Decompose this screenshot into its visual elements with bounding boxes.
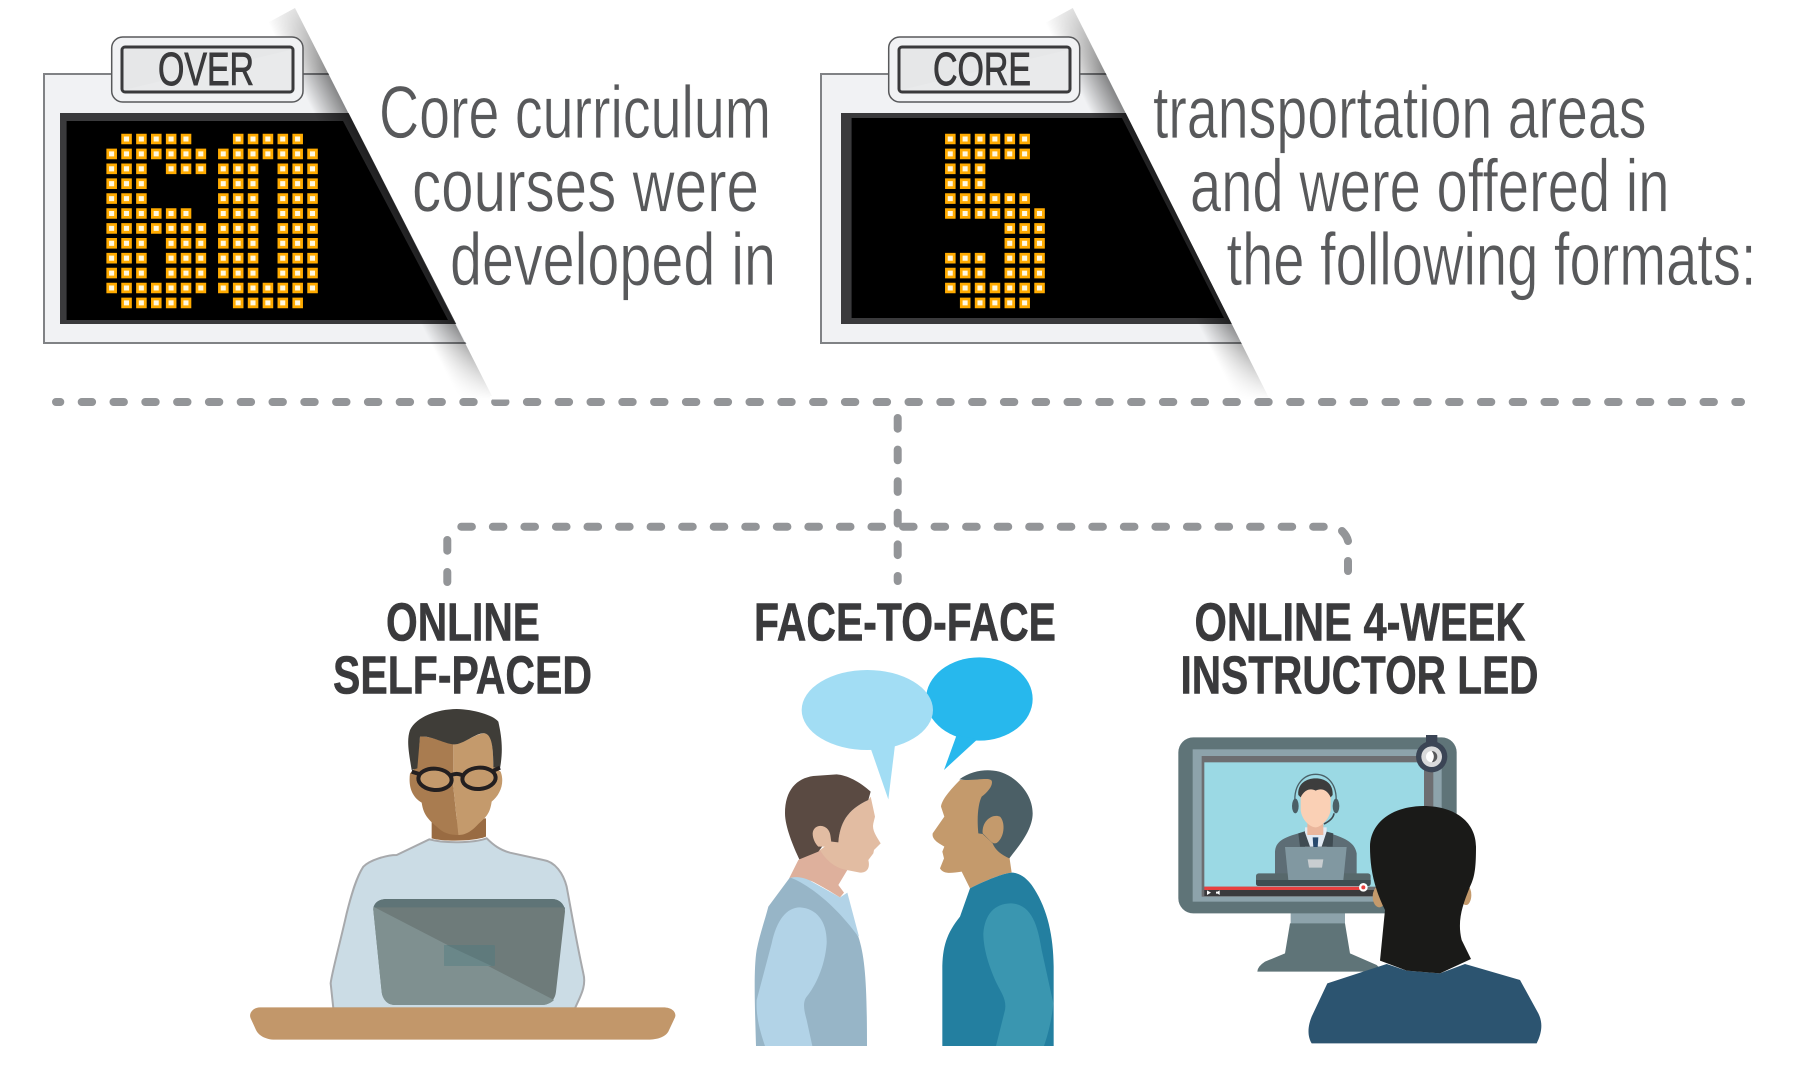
speech bubble: blue: [926, 657, 1033, 770]
laptop: [373, 899, 565, 1005]
webcam: [1416, 735, 1447, 772]
text block: transportation areas and formats: and were offered in: [1190, 144, 1670, 228]
torso: [331, 838, 584, 1008]
text block: core curriculum courses: Core curriculum: [379, 71, 771, 154]
heading: online self-paced: ONLINE: [386, 592, 540, 652]
text block: core curriculum courses: developed in: [450, 218, 776, 301]
left man: [755, 774, 881, 1046]
panel: sign showing core 5: [821, 8, 1270, 400]
heading: face-to-face: FACE-TO-FACE: [754, 592, 1056, 652]
heading: online 4-week instructor led: [1180, 592, 1538, 705]
instructor on screen: [1256, 774, 1371, 886]
heading: online 4-week instructor led: ONLINE 4-WEEK: [1194, 592, 1526, 652]
heading: online 4-week instructor led: INSTRUCTOR LED: [1180, 645, 1538, 705]
monitor stand: [1257, 912, 1383, 972]
monitor: [1178, 737, 1457, 913]
illustration: two people talking: [755, 657, 1054, 1046]
speech bubble: light blue: [802, 670, 933, 799]
text block: core curriculum courses: courses were: [412, 144, 759, 228]
illustration: person at a laptop: [250, 709, 675, 1040]
hair: [408, 709, 502, 770]
LED digits: 60: [106, 139, 322, 303]
face: [410, 733, 502, 835]
desk: [250, 1007, 675, 1040]
sign tag: CORE: CORE: [933, 43, 1031, 95]
dashed connector lines: [56, 402, 1741, 582]
text block: transportation areas and formats: transportation areas: [1153, 71, 1646, 154]
neck: [432, 818, 486, 841]
viewer: [1309, 806, 1541, 1043]
LED digit: 5: [945, 139, 1049, 303]
right man: [933, 770, 1054, 1046]
sign tag: CORE: [889, 37, 1080, 102]
sign tag: OVER: [112, 37, 303, 102]
illustration: viewer watching instructor on monitor: [1178, 735, 1541, 1043]
video controls: [1204, 883, 1378, 896]
heading: online self-paced: [333, 592, 592, 705]
panel: sign showing over 60: [44, 8, 494, 400]
glasses: [412, 767, 500, 791]
text block: core curriculum courses: [379, 71, 776, 301]
text block: transportation areas and formats: [1153, 71, 1756, 301]
heading: online self-paced: SELF-PACED: [333, 645, 592, 705]
sign tag: OVER: OVER: [158, 43, 254, 95]
